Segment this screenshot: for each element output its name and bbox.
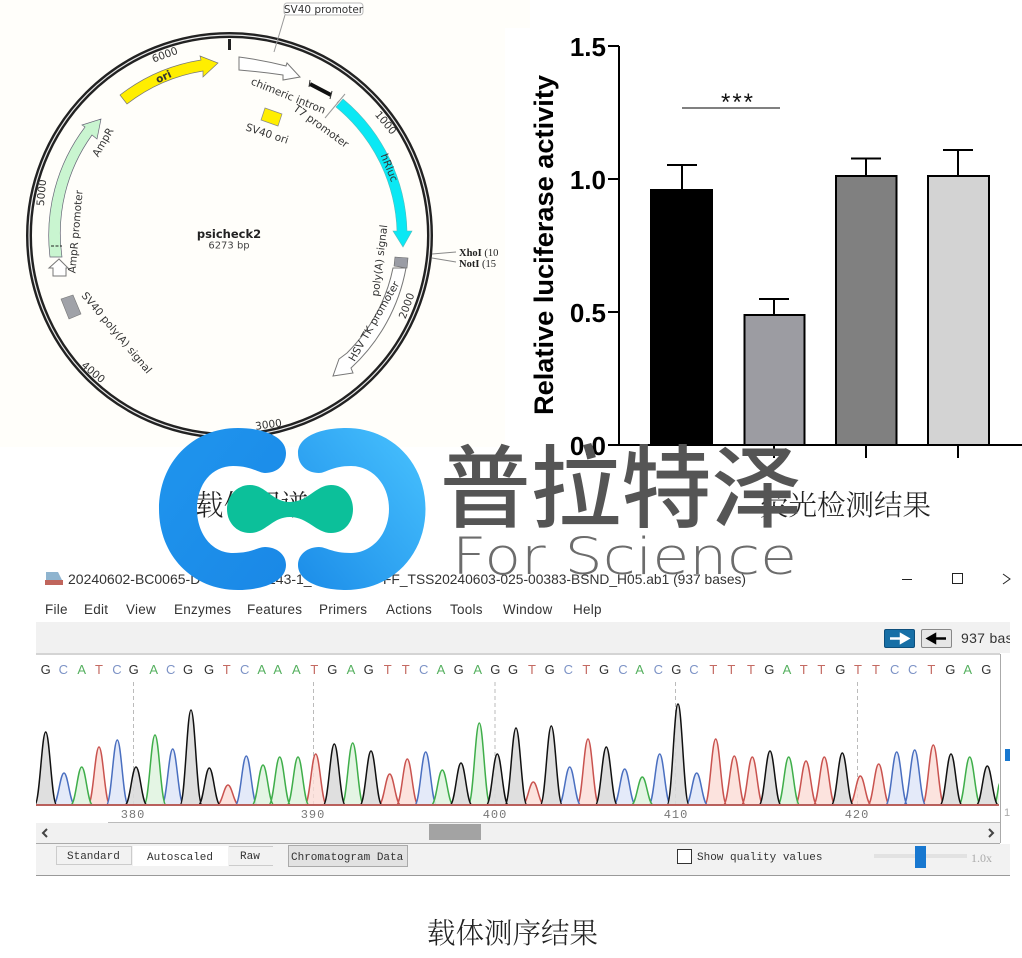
menu bar: Enzymes [174,602,231,617]
panel: plasmid map [26,2,498,437]
base calls: G [364,662,374,677]
feature: poly(A) signal [370,224,408,297]
base calls: G [508,662,518,677]
feature: SV40 ori: SV40 ori [244,122,290,147]
base calls: G [454,662,464,677]
base calls: C [654,662,663,677]
feature: ori: ori [154,68,174,86]
base calls: T [927,662,935,677]
position ruler [108,808,1000,822]
caption: sequencing result: 载体测序结果 [427,918,598,950]
base calls: T [747,662,755,677]
base calls: G [981,662,991,677]
base calls: C [564,662,573,677]
base calls: T [727,662,735,677]
menu bar: Window [503,602,553,617]
bar 2 [744,299,804,445]
plasmid backbone ring [29,35,430,436]
scale marks: 1000 [372,109,398,137]
base calls: A [292,662,301,677]
bar 3 [836,158,896,445]
bar 4 [928,150,989,445]
y axis title: Relative luciferase activity [529,75,559,415]
vertical scroll marker: 1 [1004,807,1010,819]
base calls: A [149,662,158,677]
logo wordmark: 普拉特泽 [440,416,802,546]
feature: AmpR [49,119,116,257]
feature: hRluc: hRluc [378,152,400,184]
menu bar: File [45,602,68,617]
base calls: T [223,662,231,677]
restriction sites: XhoI (10 [459,248,498,259]
base calls: A [437,662,446,677]
restriction sites [432,248,498,270]
feature: hRluc [336,99,412,247]
base calls: G [204,662,214,677]
base calls: G [599,662,609,677]
base calls: A [635,662,644,677]
window title bar: 20240602-BC0065-D [68,571,200,587]
y axis [570,32,1022,461]
view tabs [36,844,1010,876]
menu bar: Features [247,602,302,617]
toolbar [36,622,1022,654]
feature: SV40 ori [244,108,290,147]
menu bar: View [126,602,156,617]
view tabs: Chromatogram Data [291,852,404,864]
base calls: A [473,662,482,677]
feature: ori [120,56,218,104]
base calls: T [528,662,536,677]
y axis: 0.5 [570,298,606,328]
menu bar: Actions [386,602,432,617]
zoom slider: 1.0x [971,851,992,865]
base calls: A [347,662,356,677]
base calls: G [764,662,774,677]
feature: AmpR: AmpR [90,126,116,159]
significance marker [682,89,780,116]
base calls: C [890,662,899,677]
caption: luciferase result: 荧光检测结果 [760,490,931,522]
view tabs: Standard [67,851,120,863]
position ruler: 400 [483,808,507,822]
window title bar: FF_TSS20240603-025-00383-BSND_H05.ab1 (937 bases) [383,571,746,587]
restriction sites: NotI (15 [459,259,496,270]
base calls: A [257,662,266,677]
base calls: G [327,662,337,677]
base calls: A [273,662,282,677]
scale marks: 5000 [35,179,49,207]
position ruler: 380 [121,808,145,822]
base calls: C [59,662,68,677]
y axis: 1.5 [570,32,606,62]
base calls: T [95,662,103,677]
feature: HSV TK promoter [333,268,406,376]
logo tagline: For Science [452,528,797,587]
panel: sequencing window [35,571,1022,876]
base calls: T [384,662,392,677]
base calls: T [402,662,410,677]
feature: SV40 poly(A) signal: SV40 poly(A) signal [79,290,154,376]
y axis: 1.0 [570,165,606,195]
feature: SV40 promoter: SV40 promoter [284,4,364,16]
base calls: T [854,662,862,677]
base calls: T [872,662,880,677]
significance marker: *** [721,89,755,116]
panel: bar chart [529,32,1022,461]
menu bar: Edit [84,602,108,617]
chromatogram traces [35,682,1000,806]
base calls: G [129,662,139,677]
menu bar: Tools [450,602,483,617]
vertical scroll marker [1004,749,1010,819]
base calls: G [945,662,955,677]
base calls: C [240,662,249,677]
base calls: G [835,662,845,677]
base calls: A [783,662,792,677]
quality checkbox: Show quality values [697,852,822,864]
base calls: T [709,662,717,677]
base calls: A [77,662,86,677]
window title bar: 243-1_ [268,571,312,587]
scale marks: 3000 [255,417,283,433]
menu bar [45,602,602,617]
base calls: G [41,662,51,677]
feature: poly(A) signal: poly(A) signal [370,224,390,297]
base calls: C [908,662,917,677]
base calls: C [112,662,122,677]
y axis: 0.0 [570,431,606,461]
feature: AmpR promoter: AmpR promoter [66,189,86,274]
base calls: C [419,662,428,677]
position ruler: 420 [845,808,869,822]
scale marks: 4000 [79,360,107,386]
horizontal scrollbar [36,654,1000,844]
plasmid name [197,227,261,252]
feature: chimeric intron: chimeric intron [249,76,327,117]
base calls: C [618,662,628,677]
position ruler: 410 [664,808,688,822]
view tabs: Autoscaled [147,852,213,864]
logo icon [159,428,426,590]
feature: HSV TK promoter: HSV TK promoter [347,279,403,364]
feature: SV40 promoter [239,3,364,80]
bar 1 [651,165,712,445]
scale marks: 6000 [150,45,180,65]
base calls: C [689,662,699,677]
scale marks: 2000 [397,291,417,321]
plasmid name: psicheck2 [197,227,261,241]
base calls: T [817,662,825,677]
zoom slider [874,846,992,868]
position ruler: 390 [301,808,325,822]
feature: AmpR promoter [49,189,86,276]
base calls: T [310,662,318,677]
feature: T7 promoter: T7 promoter [290,102,351,151]
window title bar [45,571,1010,587]
base calls: G [671,662,681,677]
view tabs: Raw [240,851,260,863]
base calls: T [582,662,590,677]
menu bar: Primers [319,602,367,617]
plasmid name: 6273 bp [208,240,250,252]
base calls: G [545,662,555,677]
caption: plasmid map: 载体图谱 [195,490,309,522]
base calls: T [800,662,808,677]
base calls: C [166,662,175,677]
base calls: G [490,662,500,677]
base calls: A [963,662,972,677]
menu bar: Help [573,602,602,617]
scale marks [35,45,417,433]
logo [159,416,802,590]
base calls [41,662,991,677]
base calls: G [183,662,193,677]
